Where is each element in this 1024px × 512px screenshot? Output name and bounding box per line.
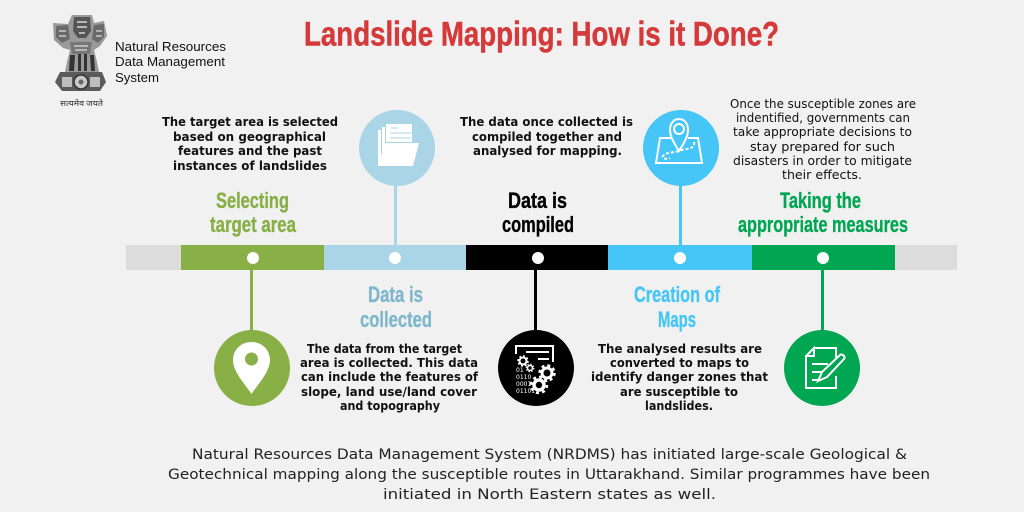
organisation name [115, 39, 227, 85]
step 1 description: instances of landslides [173, 159, 327, 173]
icon: data processing gears: 01 [516, 367, 524, 374]
icon: data processing gears: 0110 [516, 374, 531, 381]
step 3 stem [534, 270, 537, 332]
step 5 description [730, 97, 916, 182]
step 5 description: indentified, governments can [736, 111, 910, 125]
step 4 description: converted to maps to [610, 356, 749, 370]
step 5 stem [821, 270, 824, 332]
organisation name: Natural Resources [115, 39, 227, 54]
step 1: selecting target area [162, 115, 338, 406]
step 1 heading [210, 188, 297, 237]
icon: folder with documents [359, 110, 435, 186]
step 2 description: can include the features of [301, 370, 479, 384]
footer note [168, 447, 930, 503]
step 2 description: and topography [340, 399, 440, 413]
step 4 heading: Creation of [634, 282, 720, 307]
step 4 description: identify danger zones that [591, 370, 768, 384]
footer note: Geotechnical mapping along the susceptible routes in Uttarakhand. Similar programmes have been [168, 467, 930, 483]
step 4: creation of maps [591, 110, 768, 413]
icon: document with pen [784, 330, 860, 406]
step 4 description: The analysed results are [598, 342, 762, 356]
step 3 heading: Data is [508, 188, 567, 213]
step 2 description [300, 342, 479, 413]
step 2 description: area is collected. This data [300, 356, 478, 370]
step 3 heading: compiled [502, 212, 574, 237]
step 1 description [162, 115, 338, 173]
organisation name: System [115, 70, 159, 85]
step 1 stem [250, 270, 253, 332]
step 4 description: landslides. [645, 399, 713, 413]
step 3 description [460, 115, 633, 158]
step 2 description: slope, land use/land cover [301, 385, 477, 399]
logo motto: सत्यमेव जयते [60, 98, 103, 109]
step 2: data is collected [300, 110, 479, 413]
icon: data processing gears [498, 330, 574, 406]
step 5: taking the appropriate measures [730, 97, 916, 406]
step 3 description: analysed for mapping. [473, 144, 622, 158]
step 3 description: compiled together and [472, 130, 622, 144]
step 5 description: Once the susceptible zones are [730, 97, 916, 111]
step 5 description: their effects. [782, 168, 862, 182]
step 1 description: based on geographical [173, 130, 326, 144]
step 3 description: The data once collected is [460, 115, 633, 129]
step 1 description: The target area is selected [162, 115, 338, 129]
footer note: initiated in North Eastern states as well. [383, 487, 716, 503]
step 4 description [591, 342, 768, 413]
step 2 heading: collected [360, 307, 432, 332]
step 1 heading: Selecting [216, 188, 289, 213]
step 2 description: The data from the target [307, 342, 462, 356]
step 4 heading [634, 282, 720, 332]
step 5 description: stay prepared for such [750, 140, 895, 154]
step 3 heading [502, 188, 574, 237]
step 1 heading: target area [210, 212, 297, 237]
step 5 heading [738, 188, 908, 237]
step 4 stem [679, 184, 682, 245]
step 4 description: are susceptible to [620, 385, 738, 399]
icon: location pin [214, 330, 290, 406]
step 2 heading [360, 282, 432, 332]
icon: data processing gears: 01101 [516, 388, 535, 395]
step 5 heading: Taking the [780, 188, 861, 213]
icon: data processing gears: 0001 [516, 381, 531, 388]
organisation name: Data Management [115, 54, 225, 69]
step 1 description: features and the past [178, 144, 322, 158]
step 3: data is compiled [460, 115, 633, 406]
title: Landslide Mapping: How is it Done? [304, 16, 779, 54]
logo: national emblem [53, 15, 107, 109]
timeline bar [126, 245, 957, 270]
step 2 stem [394, 184, 397, 245]
step 5 description: take appropriate decisions to [733, 125, 912, 139]
step 5 description: disasters in order to mitigate [733, 154, 912, 168]
footer note: Natural Resources Data Management System (NRDMS) has initiated large-scale Geological & [192, 447, 907, 463]
step 4 heading: Maps [658, 307, 696, 332]
step 5 heading: appropriate measures [738, 212, 908, 237]
step 2 heading: Data is [368, 282, 423, 307]
icon: map with pin [643, 110, 719, 186]
